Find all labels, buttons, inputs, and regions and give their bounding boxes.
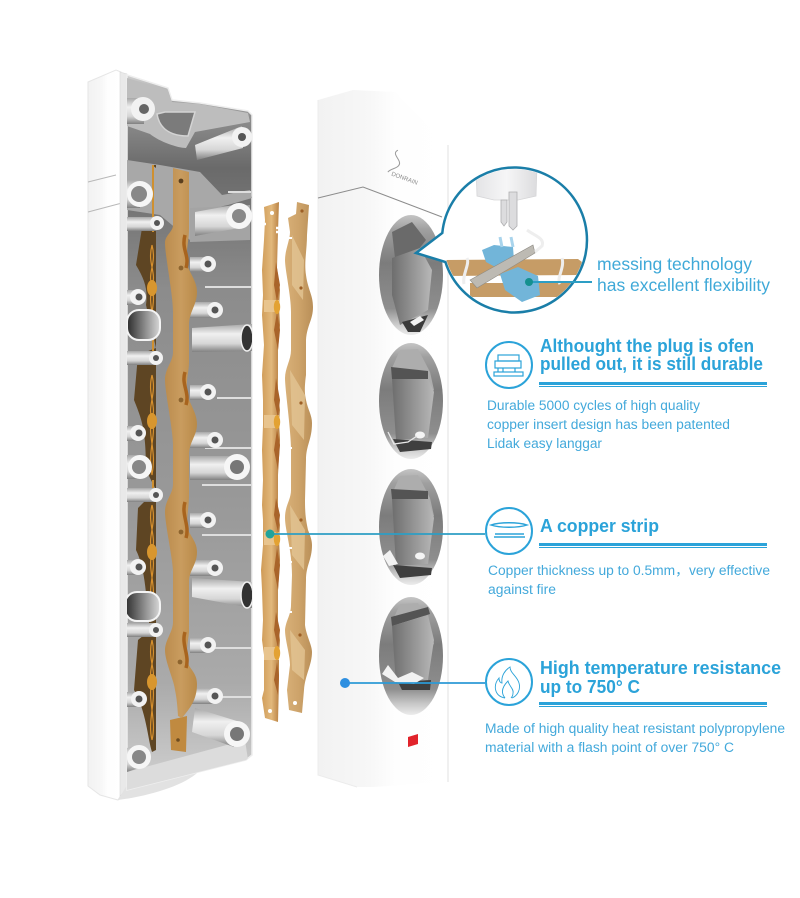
description: Durable 5000 cycles of high quality bbox=[487, 398, 700, 413]
heading rule bbox=[539, 382, 767, 387]
plug body bbox=[476, 165, 537, 200]
feature: durable plug: copper insert design has been patented bbox=[487, 417, 730, 432]
cover edge highlights bbox=[318, 100, 357, 787]
housing frame rim bbox=[120, 72, 127, 796]
red indicator light bbox=[408, 734, 418, 747]
exploded product infographic bbox=[88, 70, 784, 800]
icon: stacked bricks bbox=[486, 342, 532, 388]
cross moulding bbox=[127, 160, 252, 240]
feature: durable plug: Lidak easy langgar bbox=[487, 436, 603, 451]
back strip: dark brown bbox=[134, 165, 157, 752]
leader line: copper strip bbox=[266, 530, 485, 538]
callout: messing technology bbox=[525, 254, 770, 295]
feature: high temperature resistance bbox=[485, 657, 785, 755]
brand logo: DONRAIN bbox=[390, 172, 418, 187]
cover seam line bbox=[318, 187, 442, 217]
posts bbox=[125, 97, 253, 772]
housing outer side wall bbox=[88, 70, 121, 800]
heading: A copper strip bbox=[540, 515, 659, 536]
feature: durable plug: pulled out, it is still durable bbox=[540, 353, 763, 374]
cover body bbox=[318, 90, 447, 787]
heading rule bbox=[539, 543, 767, 548]
blue clip bbox=[482, 245, 540, 302]
icon: flame bbox=[486, 659, 532, 705]
right assembled front cover bbox=[318, 90, 448, 787]
left housing: open rear shell bbox=[88, 70, 253, 800]
feature: high temperature resistance: material with a flash point of over 750° C bbox=[485, 740, 734, 755]
icon: copper disc bbox=[486, 508, 532, 554]
brand logo bbox=[386, 150, 426, 187]
leader line: housing material bbox=[340, 678, 485, 688]
magnified callout: plug and contact clip bbox=[416, 165, 590, 312]
bottom ledge bbox=[127, 740, 248, 790]
leader line bbox=[528, 281, 592, 283]
feature: durable plug bbox=[486, 335, 767, 451]
white contact springs bbox=[464, 230, 563, 284]
loose copper strip one bbox=[261, 202, 285, 722]
lower moulding block bbox=[190, 205, 250, 242]
silver bar bbox=[470, 245, 535, 288]
lens background and pointer bbox=[416, 167, 587, 312]
housing copper strip bbox=[165, 168, 197, 752]
plug pins bbox=[501, 192, 517, 230]
feature: copper strip bbox=[486, 508, 770, 597]
top moulding band bbox=[127, 78, 250, 148]
description: Made of high quality heat resistant polypropylene bbox=[485, 721, 785, 736]
housing cavity bbox=[127, 75, 252, 790]
heading rule bbox=[539, 702, 767, 707]
feature: high temperature resistance: up to 750° C bbox=[540, 676, 640, 697]
top arch pocket bbox=[157, 112, 195, 136]
socket 2 bbox=[379, 343, 443, 459]
callout: messing technology: has excellent flexibility bbox=[597, 275, 770, 295]
heading: High temperature resistance bbox=[540, 657, 781, 678]
leader dot bbox=[525, 278, 533, 286]
loose copper strip two bbox=[285, 202, 313, 713]
socket 3 bbox=[379, 469, 443, 585]
lens contents bbox=[446, 169, 582, 302]
ribs bbox=[202, 192, 251, 697]
housing bottom foot bbox=[118, 772, 198, 800]
socket 4 bbox=[379, 597, 443, 715]
callout text: messing technology bbox=[597, 254, 752, 274]
internal moulding and posts bbox=[125, 78, 253, 790]
socket 1 bbox=[379, 215, 443, 335]
heading: Althought the plug is ofen bbox=[540, 335, 754, 356]
copper band bbox=[440, 259, 590, 297]
cover right edge bbox=[447, 145, 449, 782]
description: Copper thickness up to 0.5mm，very effective bbox=[488, 563, 770, 578]
feature: copper strip: against fire bbox=[488, 582, 556, 597]
housing seam bbox=[88, 175, 122, 212]
